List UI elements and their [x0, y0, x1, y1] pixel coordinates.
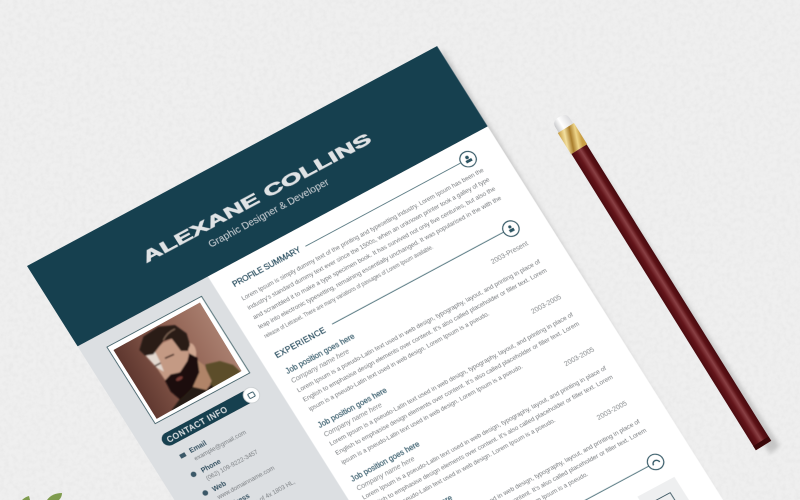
job 2 — [316, 291, 587, 466]
dark shirt — [172, 384, 215, 413]
photo frame — [107, 296, 250, 424]
contact: email: Email — [188, 440, 208, 455]
contact: email: example@gmail.com — [193, 429, 248, 462]
eyes — [155, 354, 174, 366]
panel: sidebar — [77, 276, 495, 500]
divider line: profile — [305, 163, 460, 246]
contact: web: Web — [211, 481, 228, 493]
pencil body — [571, 145, 771, 450]
profile text: industry's standard dummy text ever since the 1500s, when an unknown printer took a galley of type — [246, 176, 492, 312]
job 2: Job position goes here — [316, 385, 389, 430]
lips — [175, 375, 183, 382]
pencil end — [753, 437, 771, 450]
education tile — [637, 477, 697, 500]
photo background — [113, 302, 242, 419]
profile text: leap into electronic typesetting, remaining essentially unchanged. It was popularised in the with the — [257, 195, 503, 331]
profile text: release of Letraset. There are many variations of passages of Lorem Ipsum available. — [263, 244, 435, 340]
profile text: and scrambled it to make a type specimen book. It has survived not only five centuries, but also the — [252, 185, 498, 321]
job title: Graphic Designer & Developer — [207, 177, 332, 250]
neck — [192, 359, 212, 390]
job 1 — [283, 237, 554, 413]
divider line: experience — [332, 232, 504, 324]
job 3: Lorem Ipsum is a pseudo-Latin text used in web design, typography, layout, and printing in place of — [361, 365, 608, 500]
contact: phone — [190, 440, 260, 488]
hair part — [163, 329, 175, 340]
contact: email — [178, 422, 248, 468]
job 2: English to emphasise design elements over content. It's also called placeholder or filler text. Lorem — [334, 321, 581, 457]
section: profile summary — [228, 149, 509, 340]
heading: profile summary: PROFILE SUMMARY — [231, 245, 303, 289]
job 2: 2003-2005 — [529, 292, 563, 316]
contact pill — [159, 385, 263, 449]
leaves — [22, 493, 62, 500]
jacket — [205, 361, 243, 390]
job 1: 2003-Present — [489, 238, 531, 266]
job 2: Lorem Ipsum is a pseudo-Latin text used in web design, typography, layout, and printing in place of — [328, 311, 575, 448]
eraser — [552, 113, 575, 135]
job 1: Job position goes here — [283, 331, 357, 376]
heading: experience: EXPERIENCE — [273, 326, 328, 360]
job 2: Company name here — [322, 400, 384, 439]
panel: header band — [27, 46, 488, 346]
job 1: Company name here — [289, 347, 351, 385]
photo: bearded man — [113, 302, 243, 419]
contact: web: www.domainname.com — [215, 465, 276, 500]
ear — [187, 342, 197, 358]
contact pill: CONTACT INFO — [165, 405, 229, 445]
job 3: 2003-2005 — [562, 345, 596, 368]
job 1: ipsum is a pseudo-Latin text used in web design. Lorem Ipsum is a pseudo. — [308, 310, 491, 413]
face highlight — [146, 352, 164, 372]
icon: headset — [644, 451, 667, 473]
job 1: English to emphasise design elements over content. It's also called placeholder or filler text. Lorem — [302, 267, 548, 404]
profile text: Lorem Ipsum is simply dummy text of the printing and typesetting industry. Lorem Ipsum has been the — [240, 167, 486, 302]
section: education divider — [474, 451, 667, 500]
section: experience — [268, 218, 655, 500]
ferrule — [558, 123, 587, 154]
beard — [165, 353, 199, 400]
job 4: 2003-2005 — [595, 399, 629, 422]
portrait figure — [139, 325, 243, 413]
contact list — [178, 414, 297, 500]
icon: contact — [240, 385, 263, 406]
job 4 — [381, 398, 654, 500]
contact: web — [201, 457, 276, 500]
icon: profile — [457, 149, 479, 170]
pencil shadow — [560, 122, 780, 454]
icon: book — [655, 493, 678, 500]
name: ALEXANE COLLINS — [139, 131, 375, 266]
pencil — [551, 112, 772, 451]
icon: experience — [500, 218, 522, 239]
hair — [139, 325, 190, 356]
contact: phone: (062) 109-9222-3457 — [205, 449, 260, 482]
job 1: Lorem Ipsum is a pseudo-Latin text used in web design, typography, layout, and printing in place of — [296, 258, 542, 394]
paper shadow — [440, 48, 718, 500]
job 3: Company name here — [354, 454, 416, 492]
face — [154, 338, 190, 382]
job 3: Job position goes here — [348, 439, 422, 484]
job 2: ipsum is a pseudo-Latin text used in web design. Lorem Ipsum is a pseudo. — [340, 363, 525, 466]
contact: phone: Phone — [200, 458, 223, 475]
